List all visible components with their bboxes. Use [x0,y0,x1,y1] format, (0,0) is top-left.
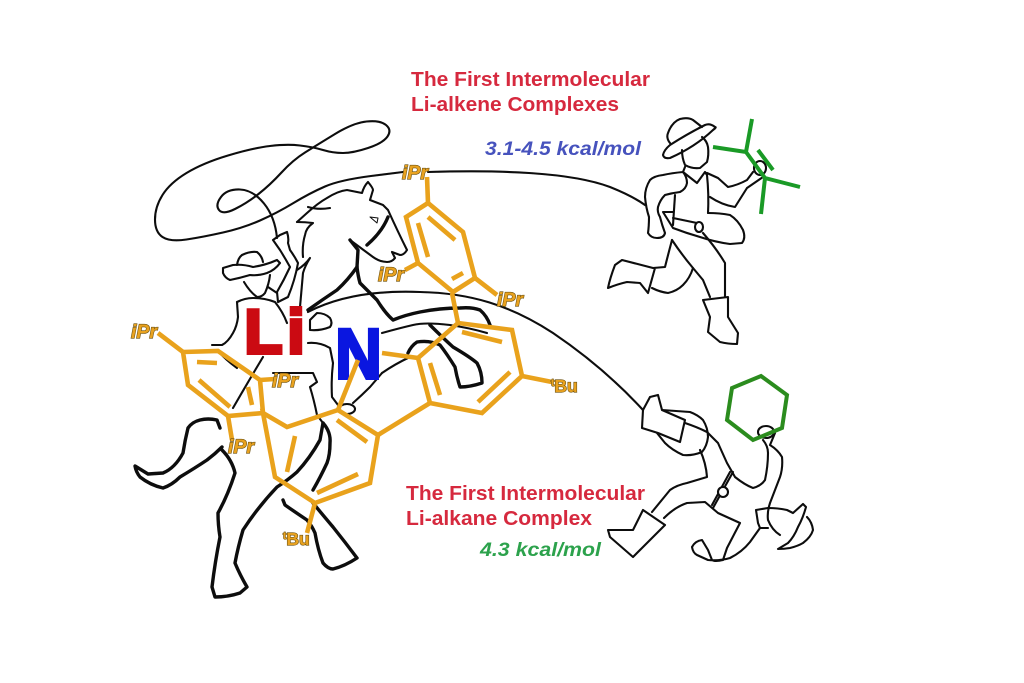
rearing horse [135,182,490,597]
saddle [273,373,323,423]
raised arm [273,232,298,302]
rider hat [223,260,280,280]
heading: alkane complex: The First Intermolecular [406,482,645,505]
substituent labels: Bu [286,529,310,549]
heading: alkene complexes: The First Intermolecular [411,68,650,91]
substituent labels: iPr [228,436,255,458]
head [682,137,708,168]
orange ligand molecule [158,177,552,533]
lasso loop and belt [663,212,744,244]
binding energy: alkene: 3.1-4.5 kcal/mol [485,138,642,160]
rider face [244,275,270,297]
N atom label: N [335,316,382,394]
substituent labels: t [551,378,555,389]
belt [712,472,733,508]
substituent labels: iPr [272,370,299,392]
lower aryl ring [158,333,275,440]
rope to lower cowboy [308,292,643,410]
heading: alkane complex: Li-alkane Complex [406,507,593,530]
lasso rope [155,121,645,240]
horse belly and hind legs [382,357,410,373]
dropped hat [756,508,768,528]
lower leg and boot [652,450,707,512]
torso and arms [683,167,708,213]
substituent labels: t [283,531,287,542]
rider torso [237,298,287,323]
horse forelegs [382,324,487,333]
torso and arm [685,423,768,488]
horse head [297,182,407,262]
thigh [657,410,708,455]
falling cowboy with alkane [608,395,813,561]
substituent labels: iPr [497,289,524,311]
hat [663,124,716,158]
substituent labels: iPr [378,264,405,286]
upper aryl ring [405,177,497,295]
mane and neck [297,222,313,257]
upper boot [642,395,685,442]
alkene molecule [713,119,800,214]
hand [310,313,332,330]
Li atom label: Li [244,298,305,367]
substituent labels: Bu [554,376,578,396]
running cowboy with alkene [608,118,766,344]
tail [135,419,222,488]
heading: alkene complexes: Li-alkene Complexes [411,93,619,116]
central ring [263,353,430,533]
substituent labels: iPr [402,162,429,184]
cyclohexane ring [727,376,787,440]
legs and boots [608,240,672,293]
right ring [418,293,552,413]
substituent labels [131,162,578,549]
rider on horse [212,232,332,345]
hind leg [212,423,323,597]
binding energy: alkane: 4.3 kcal/mol [479,539,602,561]
substituent labels: iPr [131,321,158,343]
